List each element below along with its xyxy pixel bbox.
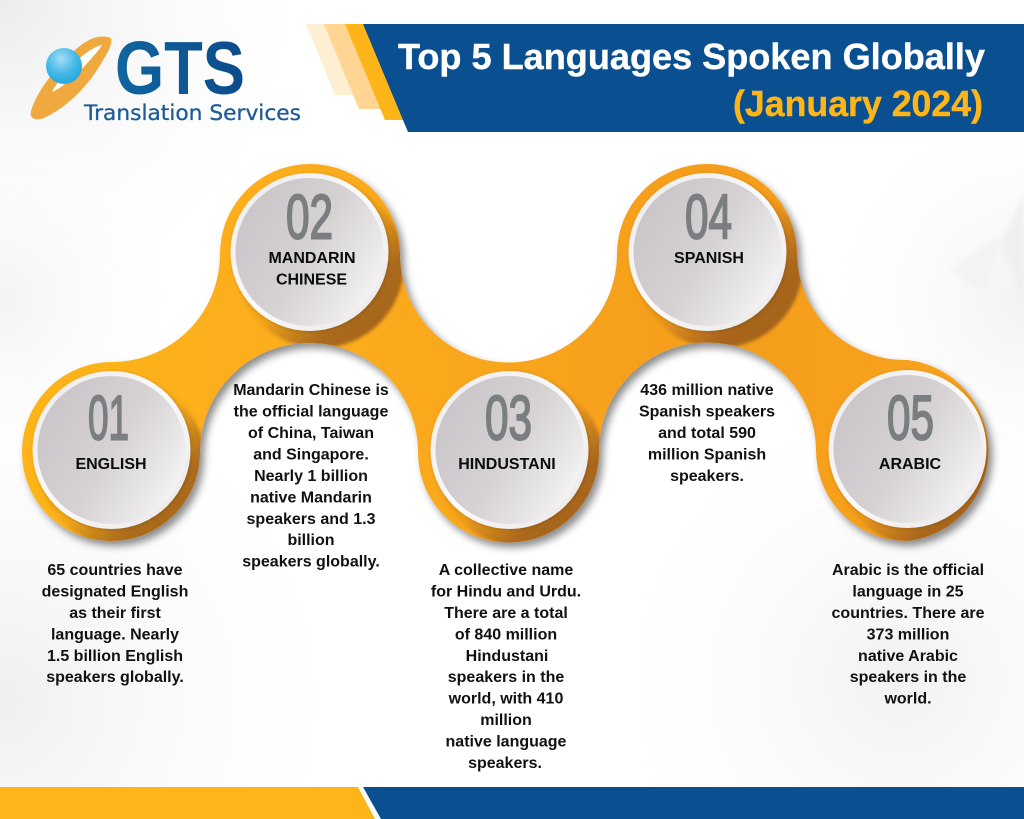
node 01: English — [32, 371, 190, 529]
text block: Hindustani: speakers. — [468, 755, 542, 772]
ribbon inner shadows — [38, 180, 1003, 547]
text block: Mandarin Chinese: Mandarin Chinese is — [233, 382, 389, 399]
text block: Spanish: million Spanish — [648, 446, 766, 464]
title: Top 5 Languages Spoken Globally — [398, 36, 985, 77]
text block: Mandarin Chinese: billion — [287, 532, 335, 549]
text block: Arabic — [832, 562, 985, 708]
text block: English: speakers globally. — [46, 669, 184, 686]
text block: Mandarin Chinese: native Mandarin — [250, 490, 372, 506]
label: ENGLISH — [75, 456, 147, 473]
footer band — [0, 787, 1024, 819]
label: CHINESE — [276, 272, 347, 288]
disc — [628, 173, 786, 331]
logo wordmark GTS: GTS — [115, 26, 245, 110]
text block: Mandarin Chinese: speakers and 1.3 — [247, 511, 376, 528]
node 03: Hindustani — [430, 371, 588, 529]
label: ARABIC — [879, 456, 942, 473]
text block: Mandarin Chinese — [233, 382, 389, 570]
node 05: Arabic — [828, 370, 986, 528]
text block: Mandarin Chinese: speakers globally. — [242, 554, 380, 570]
label: HINDUSTANI — [458, 456, 556, 473]
number: 02 — [286, 182, 333, 252]
text block: Mandarin Chinese: Nearly 1 billion — [254, 468, 368, 485]
text block: Hindustani — [431, 562, 581, 772]
disc — [230, 173, 388, 331]
text block: Arabic: countries. There are — [832, 605, 985, 622]
text block: English: as their first — [69, 605, 161, 622]
label — [268, 250, 356, 288]
text block: Spanish: Spanish speakers — [639, 404, 775, 420]
text block: Arabic: 373 million — [867, 626, 949, 644]
banner blue panel — [363, 24, 1024, 132]
label: SPANISH — [674, 250, 744, 267]
disc — [828, 370, 986, 528]
text block: English: designated English — [42, 584, 188, 600]
text block: Hindustani: native language — [446, 734, 567, 750]
text block: Arabic: speakers in the — [850, 669, 966, 686]
text block: Arabic: language in 25 — [852, 584, 964, 600]
disc — [430, 371, 588, 529]
text block: Mandarin Chinese: the official language — [234, 404, 388, 420]
number: 04 — [685, 182, 732, 252]
text block: Hindustani: million — [480, 712, 532, 729]
text block: Hindustani: world, with 410 — [448, 690, 563, 708]
text block: Hindustani: A collective name — [439, 562, 573, 579]
orange ribbon connector — [22, 164, 988, 542]
text block: Spanish: and total 590 — [658, 425, 756, 442]
text block: English: language. Nearly — [51, 626, 179, 644]
subtitle date: (January 2024) — [733, 83, 983, 124]
icon: blue globe — [46, 48, 82, 84]
banner accent stripes — [306, 24, 403, 120]
text block: Hindustani: for Hindu and Urdu. — [431, 584, 581, 600]
text block: English: 1.5 billion English — [47, 648, 183, 665]
footer blue block — [363, 787, 1024, 819]
text block: English: 65 countries have — [47, 562, 183, 579]
text block: Hindustani: Hindustani — [466, 648, 548, 665]
icon: orbit swoosh — [31, 36, 111, 119]
number: 03 — [485, 384, 532, 454]
header banner — [306, 24, 1024, 132]
logo tagline: Translation Services — [83, 101, 301, 125]
logo — [31, 26, 301, 125]
node 02: Mandarin Chinese — [230, 173, 388, 331]
text block: Spanish: speakers. — [670, 468, 744, 485]
text block: Hindustani: speakers in the — [448, 669, 564, 686]
text block: Spanish — [639, 382, 775, 485]
text block: Mandarin Chinese: of China, Taiwan — [248, 425, 374, 442]
disc — [32, 371, 190, 529]
node 04: Spanish — [628, 173, 786, 331]
text block: Mandarin Chinese: and Singapore. — [253, 446, 369, 464]
text block: English — [42, 562, 188, 686]
text block: Hindustani: of 840 million — [455, 626, 557, 644]
number: 05 — [887, 384, 934, 454]
text block: Arabic: native Arabic — [858, 648, 958, 665]
text block: Arabic: Arabic is the official — [832, 562, 984, 579]
text block: Arabic: world. — [883, 690, 932, 708]
text block: Hindustani: There are a total — [444, 605, 568, 622]
label: MANDARIN — [268, 250, 356, 267]
footer orange block — [0, 787, 375, 819]
text block: Spanish: 436 million native — [640, 382, 774, 399]
number: 01 — [88, 384, 129, 454]
